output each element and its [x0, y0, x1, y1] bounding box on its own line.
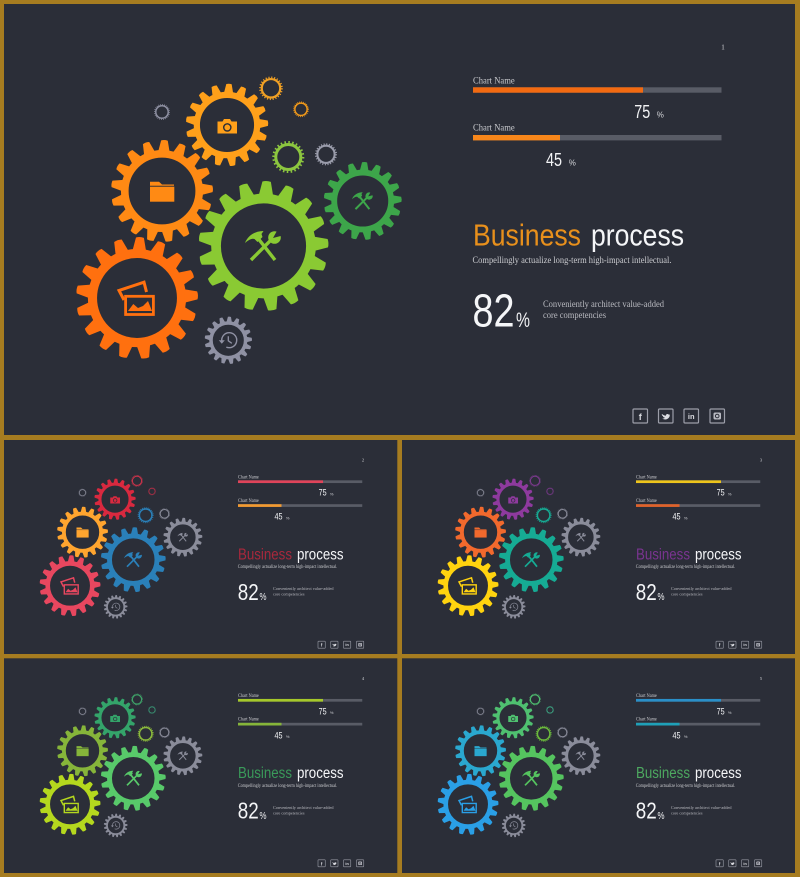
social icons — [716, 641, 762, 648]
stat: 82 percent: % — [516, 309, 530, 332]
gear: folder icon — [57, 507, 108, 558]
bar chart: 75 percent — [238, 694, 362, 716]
small gears — [79, 475, 170, 523]
title: process — [695, 765, 742, 782]
title: process — [297, 765, 344, 782]
panel: slide 2, red and blue theme — [4, 440, 397, 654]
title: process — [297, 546, 344, 563]
bar chart: 45 percent: Chart Name — [636, 718, 657, 723]
bar chart: 45 percent: Chart Name — [636, 499, 657, 504]
stat: 82 percent: 82 — [636, 579, 657, 605]
bar chart: 75 percent: Chart Name — [238, 475, 259, 480]
social icons — [716, 860, 762, 867]
gear: tools icon — [499, 746, 564, 811]
bar chart: 75 percent: % — [330, 710, 334, 715]
gear: picture icon — [39, 774, 101, 835]
gear: clock icon — [502, 814, 526, 837]
bar chart: 75 percent — [238, 475, 362, 498]
title: Business — [238, 546, 292, 563]
gear: tools icon — [499, 527, 564, 592]
stat description — [671, 805, 732, 815]
stat description — [273, 805, 334, 815]
stat: 82 percent: 82 — [636, 798, 657, 824]
bar chart: 75 percent: % — [330, 491, 334, 496]
bar chart: 45 percent: 45 — [546, 150, 562, 170]
gear: small tools icon — [561, 736, 600, 775]
stat description — [543, 299, 664, 320]
gear: small tools icon — [323, 162, 402, 240]
page number: 3 — [760, 457, 763, 462]
gear: picture icon — [39, 555, 101, 616]
gear: clock icon — [104, 814, 128, 837]
panel: slide 3, yellow and purple theme — [402, 440, 795, 654]
stat: 82 percent: % — [260, 810, 266, 822]
bar chart: 45 percent: Chart Name — [473, 124, 515, 134]
bar chart: 75 percent: Chart Name — [473, 76, 515, 86]
gear: camera icon — [492, 478, 534, 520]
bar chart: 75 percent: 75 — [717, 488, 725, 498]
title: Business — [238, 765, 292, 782]
subtitle: Compellingly actualize long-term high-impact intellectual. — [472, 256, 672, 266]
subtitle: Compellingly actualize long-term high-impact intellectual. — [636, 784, 735, 789]
gear: camera icon — [185, 84, 268, 167]
stat description: core competencies — [273, 810, 305, 815]
title: process — [591, 218, 684, 252]
gear: folder icon — [57, 725, 108, 776]
bar chart: 45 percent: % — [569, 158, 576, 168]
stat description: core competencies — [543, 310, 606, 320]
gear: clock icon — [502, 595, 526, 619]
stat description: core competencies — [671, 810, 703, 815]
subtitle: Compellingly actualize long-term high-impact intellectual. — [636, 565, 735, 570]
small gears — [155, 77, 336, 172]
panel: slide 4, lime and green theme — [4, 658, 397, 873]
gear: tools icon — [198, 181, 329, 311]
bar chart: 75 percent — [636, 475, 760, 498]
page number: 5 — [760, 676, 763, 681]
social icons — [318, 641, 364, 648]
bar chart: 45 percent — [473, 124, 722, 170]
bar chart: 45 percent: 45 — [672, 512, 680, 522]
stat description: Conveniently architect value-added — [273, 805, 334, 810]
small gears — [477, 694, 568, 741]
gear: tools icon — [101, 746, 166, 811]
bar chart: 45 percent: 45 — [672, 730, 680, 740]
small gears — [477, 475, 568, 523]
bar chart: 75 percent: Chart Name — [636, 475, 657, 480]
page number: 2 — [362, 457, 364, 462]
bar chart: 75 percent: 75 — [319, 706, 327, 716]
social icons — [633, 409, 724, 423]
gear: picture icon — [437, 555, 499, 616]
title: Business — [636, 546, 690, 563]
bar chart: 75 percent: % — [728, 710, 732, 715]
stat description — [671, 586, 732, 597]
bar chart: 75 percent: 75 — [717, 706, 725, 716]
bar chart: 45 percent: Chart Name — [238, 718, 259, 723]
bar chart: 75 percent: Chart Name — [636, 694, 657, 699]
bar chart: 75 percent: Chart Name — [238, 694, 259, 699]
gear: picture icon — [437, 774, 499, 835]
gear: small tools icon — [561, 518, 600, 557]
bar chart: 75 percent: % — [657, 110, 664, 120]
bar chart: 45 percent — [636, 499, 760, 522]
bar chart: 45 percent: % — [684, 734, 688, 739]
stat: 82 percent: 82 — [238, 579, 259, 605]
gear: folder icon — [111, 140, 213, 242]
stat description: Conveniently architect value-added — [543, 299, 664, 309]
stat description: Conveniently architect value-added — [671, 805, 732, 810]
gear: tools icon — [101, 527, 166, 592]
stat: 82 percent: 82 — [238, 798, 259, 824]
gear: folder icon — [455, 725, 506, 776]
stat: 82 percent: 82 — [472, 284, 514, 336]
gear: small tools icon — [163, 518, 202, 557]
page number: 1 — [721, 44, 725, 52]
gear: camera icon — [94, 478, 136, 520]
stat description: Conveniently architect value-added — [273, 586, 334, 591]
bar chart: 45 percent — [238, 718, 362, 740]
bar chart: 45 percent: Chart Name — [238, 499, 259, 504]
bar chart: 75 percent — [636, 694, 760, 716]
social icons — [318, 860, 364, 867]
bar chart: 45 percent — [636, 718, 760, 740]
gear: camera icon — [492, 697, 534, 739]
stat description: core competencies — [671, 592, 703, 597]
bar chart: 75 percent: 75 — [634, 102, 650, 122]
gear: clock icon — [104, 595, 128, 619]
bar chart: 45 percent: 45 — [274, 730, 282, 740]
bar chart: 45 percent: % — [286, 515, 290, 520]
bar chart: 45 percent — [238, 499, 362, 522]
title: Business — [473, 218, 581, 252]
gear: picture icon — [76, 237, 198, 359]
bar chart: 75 percent — [473, 76, 722, 122]
subtitle: Compellingly actualize long-term high-impact intellectual. — [238, 565, 337, 570]
title: Business — [636, 765, 690, 782]
stat: 82 percent: % — [658, 591, 664, 603]
stat: 82 percent: % — [658, 810, 664, 822]
gear: small tools icon — [163, 736, 202, 775]
bar chart: 75 percent: 75 — [319, 488, 327, 498]
bar chart: 45 percent: % — [684, 515, 688, 520]
gear: folder icon — [455, 507, 506, 558]
subtitle: Compellingly actualize long-term high-impact intellectual. — [238, 784, 337, 789]
bar chart: 75 percent: % — [728, 491, 732, 496]
bar chart: 45 percent: 45 — [274, 512, 282, 522]
panel: slide 5, blue and green theme — [402, 658, 795, 873]
gear: camera icon — [94, 697, 136, 739]
small gears — [79, 694, 170, 741]
stat description: Conveniently architect value-added — [671, 586, 732, 591]
stat description — [273, 586, 334, 597]
bar chart: 45 percent: % — [286, 734, 290, 739]
stat description: core competencies — [273, 592, 305, 597]
panel: main slide, orange theme — [4, 4, 795, 435]
stat: 82 percent: % — [260, 591, 266, 603]
title: process — [695, 546, 742, 563]
gear: clock icon — [204, 317, 252, 364]
page number: 4 — [362, 676, 365, 681]
